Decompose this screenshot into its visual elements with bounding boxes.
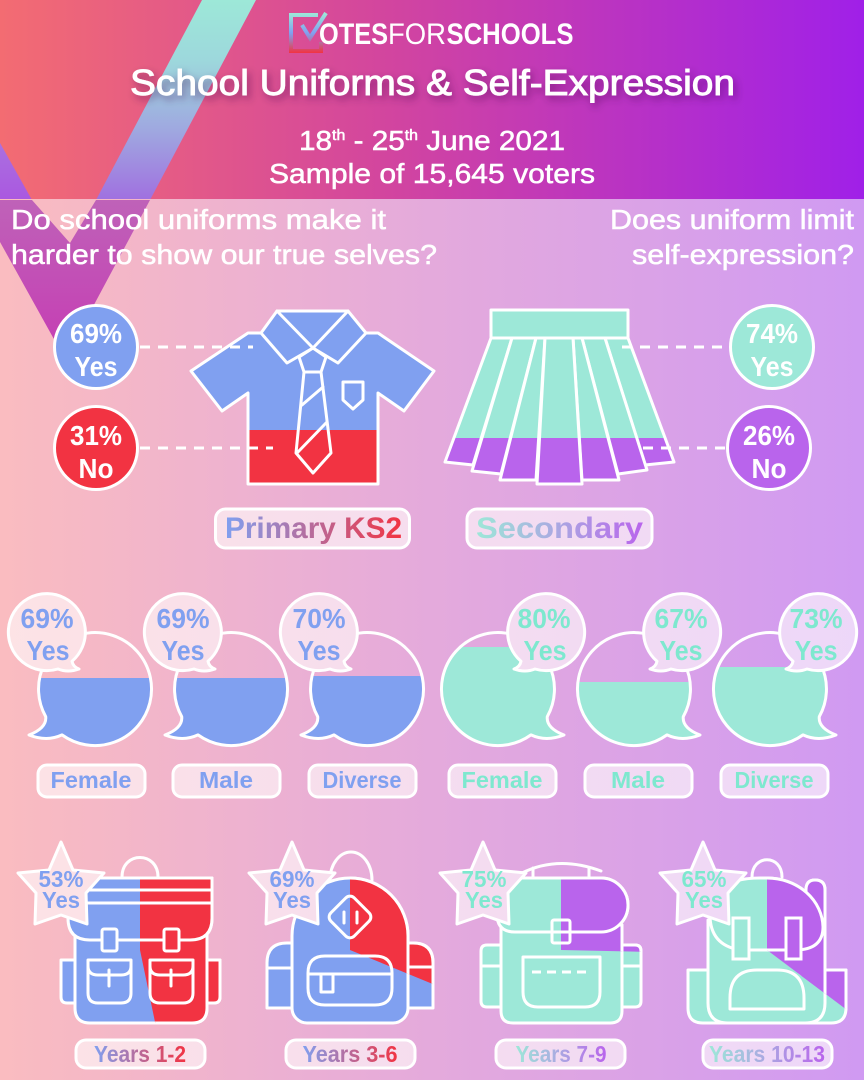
bubble: primary diverse: 70% <box>292 603 346 634</box>
date: th <box>405 127 418 144</box>
star: 53% yes: Yes <box>42 887 80 913</box>
stat: secondary yes <box>730 306 814 388</box>
label: primary female <box>38 765 145 797</box>
bubble: primary female: Yes <box>26 635 70 666</box>
bubble: primary male <box>144 594 288 746</box>
left question: Do school uniforms make it <box>11 204 386 235</box>
connector: 31% no <box>140 446 273 450</box>
label: secondary female <box>449 765 556 797</box>
label: primary female: Female <box>50 767 132 793</box>
connector: 69% yes <box>140 346 253 348</box>
connector: 74% yes <box>622 346 730 348</box>
label: primary diverse: Diverse <box>322 767 402 793</box>
label: primary KS2: Primary KS2 <box>225 512 402 545</box>
star: 53% yes <box>18 842 104 924</box>
shirt pocket <box>343 382 363 409</box>
shirt tie <box>296 348 331 473</box>
logo wordmark: SCHOOLS <box>446 18 574 51</box>
right question: self-expression? <box>632 239 854 270</box>
logo tick box <box>291 13 326 51</box>
stat: secondary no <box>728 406 810 490</box>
skirt waistband <box>491 310 628 338</box>
shirt body <box>191 333 434 484</box>
label: secondary: Secondary <box>476 512 643 545</box>
logo <box>291 13 574 51</box>
bubble: secondary female: 80% <box>518 603 571 634</box>
bubble: primary male: Yes <box>162 635 204 666</box>
star: 69% yes: Yes <box>273 887 311 913</box>
star: 69% yes <box>249 842 335 924</box>
star: 65% yes: Yes <box>685 887 723 913</box>
label: secondary female: Female <box>462 767 542 793</box>
label: primary male <box>173 765 280 797</box>
logo wordmark: OTES <box>319 18 388 51</box>
bubble: secondary diverse: 73% <box>790 603 843 634</box>
icon: backpack years 10-13 <box>688 860 846 1023</box>
label: secondary male <box>585 765 692 797</box>
label: years 1-2: Years 1-2 <box>94 1041 186 1067</box>
star: 65% yes: 65% <box>682 866 726 892</box>
star: 75% yes: Yes <box>465 887 503 913</box>
label: years 3-6: Years 3-6 <box>302 1041 398 1067</box>
stat: primary no: No <box>78 453 114 484</box>
date: th <box>332 127 345 144</box>
stat: secondary no: 26% <box>743 420 795 451</box>
date: June 2021 <box>418 125 565 156</box>
bubble: primary male: 69% <box>156 603 210 634</box>
stat: primary yes: Yes <box>74 351 118 382</box>
label: years 10-13: Years 10-13 <box>709 1041 825 1067</box>
label: secondary diverse: Diverse <box>734 767 814 793</box>
stat: secondary no: No <box>752 453 786 484</box>
left question: harder to show our true selves? <box>11 239 437 270</box>
star: 75% yes <box>440 842 526 924</box>
star: 53% yes: 53% <box>38 866 84 892</box>
icon: backpack years 3-6 <box>267 852 433 1023</box>
icon: backpack years 1-2 <box>61 858 220 1023</box>
label: primary diverse <box>309 765 416 797</box>
header background <box>0 0 864 200</box>
bubble: primary female <box>8 594 152 746</box>
logo wordmark: FOR <box>388 18 446 51</box>
shirt collar <box>261 311 366 363</box>
sample size: Sample of 15,645 voters <box>269 158 595 189</box>
left question <box>11 204 437 270</box>
label: secondary male: Male <box>611 767 665 793</box>
icon: shirt <box>191 311 434 484</box>
bubble: primary diverse <box>280 594 424 746</box>
stat: primary yes <box>54 306 138 388</box>
star: 65% yes <box>660 842 746 924</box>
bubble: secondary male <box>577 594 721 746</box>
label: primary male: Male <box>199 767 253 793</box>
stat: primary yes: 69% <box>70 318 122 349</box>
star: 69% yes: 69% <box>270 866 314 892</box>
bubble: secondary male: Yes <box>660 635 702 666</box>
stat: primary no <box>54 406 138 490</box>
lower V ribbon <box>0 200 150 359</box>
bubble: secondary female <box>441 594 585 746</box>
star: 75% yes: 75% <box>462 866 506 892</box>
right question <box>610 204 854 270</box>
bubble: secondary diverse: Yes <box>794 635 838 666</box>
logo wordmark <box>319 18 574 51</box>
bubble: primary diverse: Yes <box>298 635 340 666</box>
label: secondary diverse <box>721 765 828 797</box>
title: School Uniforms & Self-Expression <box>130 62 735 103</box>
icon: skirt <box>445 310 674 484</box>
bubble: primary female: 69% <box>20 603 74 634</box>
stat: secondary yes: Yes <box>750 351 794 382</box>
stat: primary no: 31% <box>70 420 122 451</box>
bubble: secondary female: Yes <box>524 635 566 666</box>
header V ribbon <box>0 0 256 200</box>
label: years 7-9: Years 7-9 <box>516 1041 606 1067</box>
bubble: secondary male: 67% <box>654 603 708 634</box>
date: - 25 <box>345 125 405 156</box>
date: 18 <box>299 125 330 156</box>
bubble: secondary diverse <box>713 594 857 746</box>
right question: Does uniform limit <box>610 204 854 235</box>
connector: 26% no <box>643 446 727 450</box>
icon: backpack years 7-9 <box>481 863 641 1023</box>
stat: secondary yes: 74% <box>746 318 798 349</box>
skirt pleats <box>445 338 674 484</box>
